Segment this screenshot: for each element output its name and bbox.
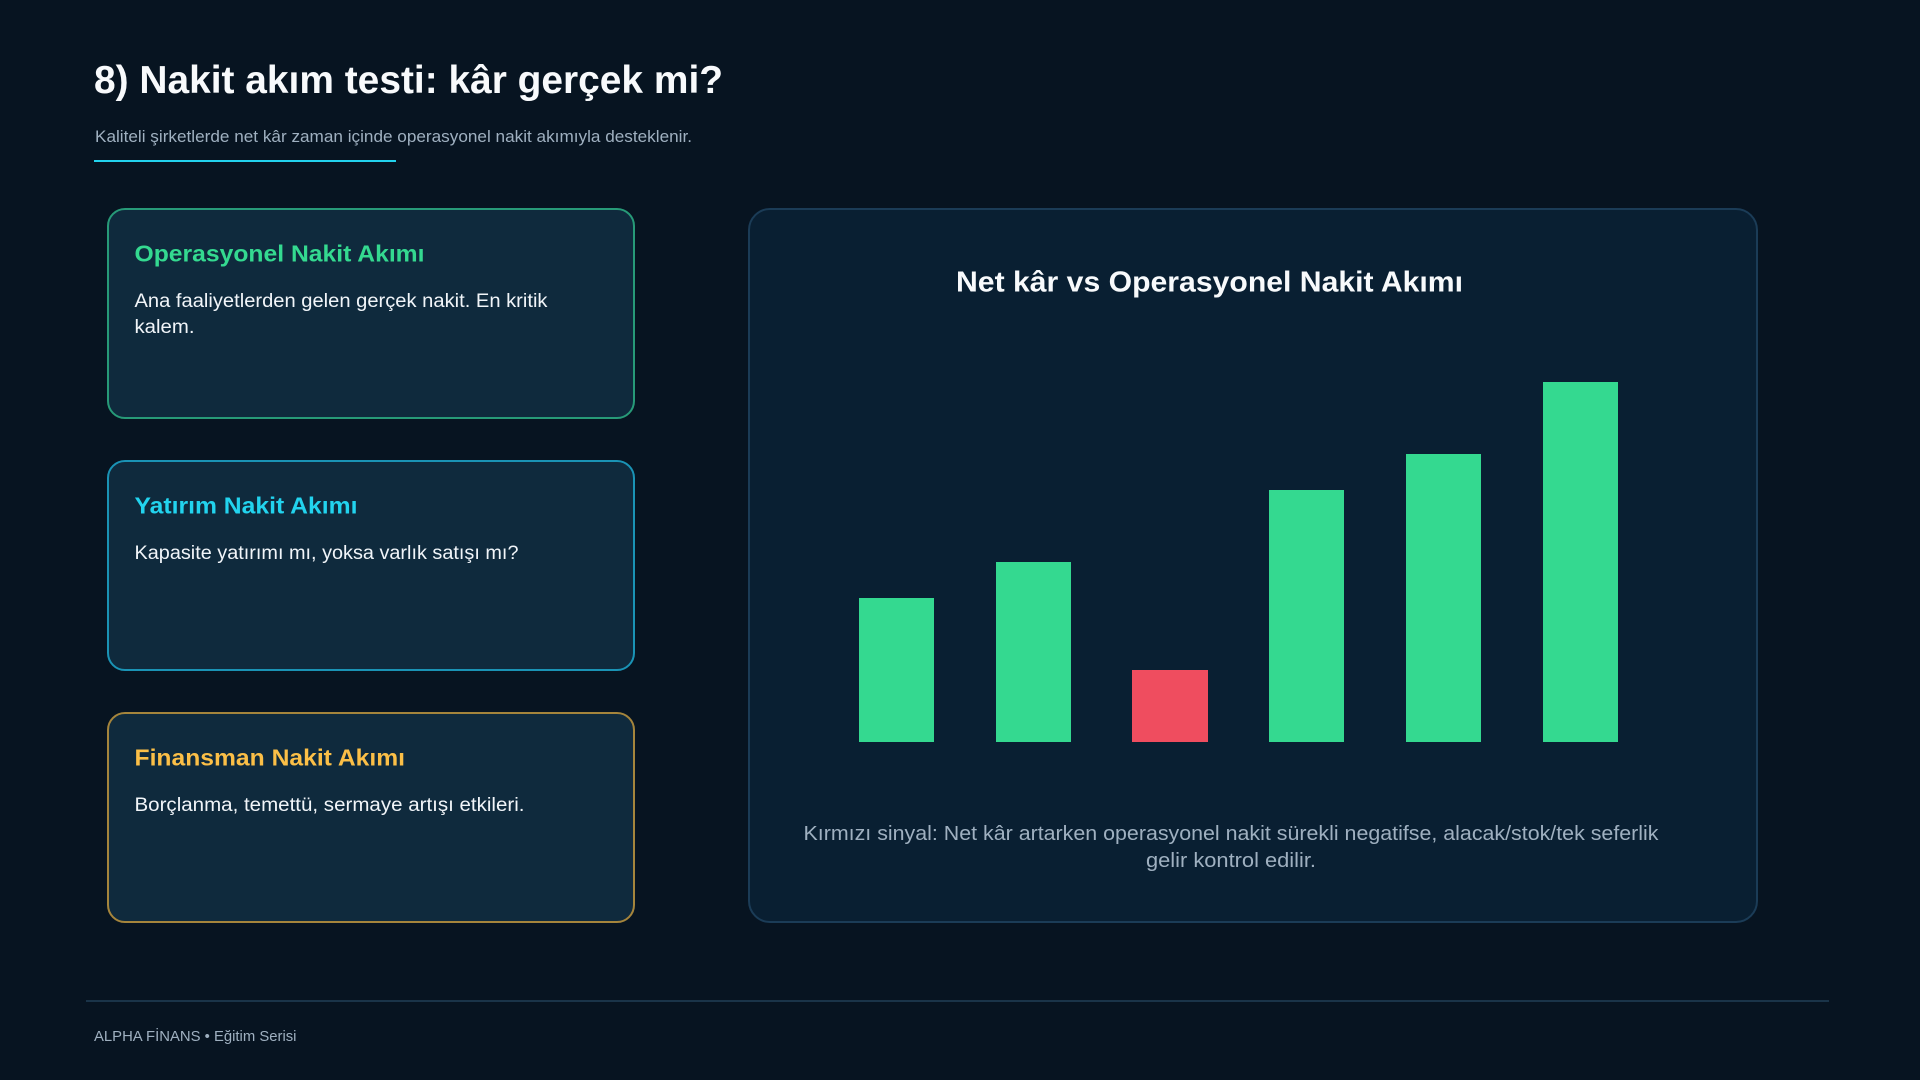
subtitle: Kaliteli şirketlerde net kâr zaman içinde operasyonel nakit akımıyla desteklenir. (95, 127, 692, 146)
chart title: Net kâr vs Operasyonel Nakit Akımı (956, 266, 1463, 298)
footer text: ALPHA FİNANS • Eğitim Serisi (94, 1027, 296, 1045)
chart note: Kırmızı sinyal: Net kâr artarken operasyonel nakit sürekli negatifse, alacak/stok/tek seferlik (804, 823, 1660, 845)
card text: operasyonel: kalem. (134, 317, 194, 338)
title: 8) Nakit akım testi: kâr gerçek mi? (94, 59, 723, 102)
accent line (94, 160, 396, 162)
footer divider (86, 1000, 1829, 1002)
card text: operasyonel: Ana faaliyetlerden gelen gerçek nakit. En kritik (134, 291, 548, 312)
panel: yatırım nakit akımı (108, 461, 634, 670)
panel: finansman nakit akımı (108, 713, 634, 922)
panel: chart (749, 209, 1757, 922)
card heading: yatırım: Yatırım Nakit Akımı (134, 492, 358, 518)
card text: operasyonel (134, 291, 548, 338)
card text: finansman: Borçlanma, temettü, sermaye artışı etkileri. (134, 795, 524, 816)
chart note (804, 823, 1660, 872)
card text: yatırım: Kapasite yatırımı mı, yoksa varlık satışı mı? (134, 543, 518, 564)
panel: operasyonel nakit akımı (108, 209, 634, 418)
card heading: finansman: Finansman Nakit Akımı (134, 744, 405, 770)
chart note: gelir kontrol edilir. (1146, 850, 1316, 872)
card heading: operasyonel: Operasyonel Nakit Akımı (134, 240, 424, 266)
bar chart (859, 382, 1618, 742)
